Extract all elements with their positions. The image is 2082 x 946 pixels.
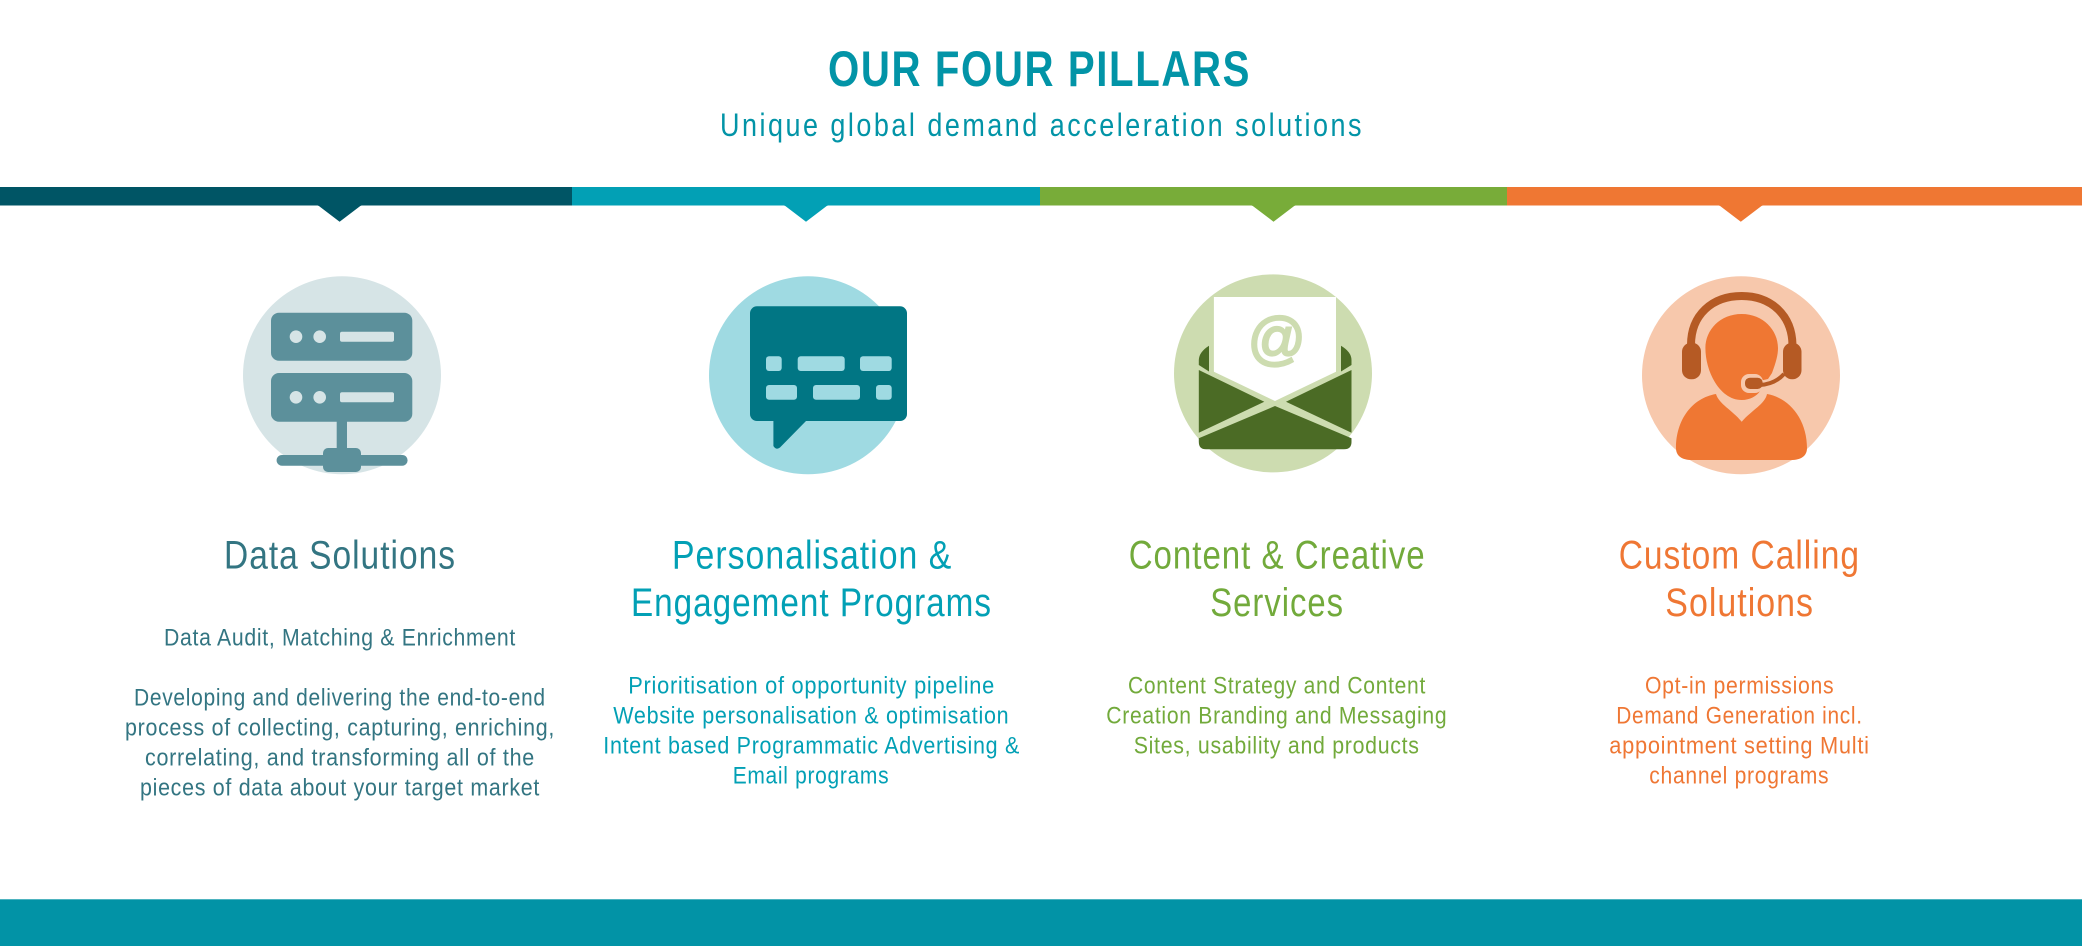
- text block: personalisation list: Website personalisation & optimisation: [613, 703, 1009, 730]
- text block: data description: pieces of data about your target market: [140, 775, 540, 802]
- panel: data solutions: [125, 276, 555, 802]
- icon: agent with headset: [1642, 276, 1840, 474]
- text block: data audit: Data Audit, Matching & Enrichment: [164, 625, 516, 652]
- heading: custom calling: [1619, 534, 1860, 625]
- panel: content and creative: [1106, 274, 1447, 760]
- text block: data description: correlating, and transforming all of the: [145, 745, 535, 772]
- text block: personalisation list: Intent based Programmatic Advertising &: [603, 733, 1020, 760]
- text block: data description: [125, 685, 555, 802]
- subtitle: Unique global demand acceleration solutions: [720, 107, 1364, 143]
- icon: speech bubble: [709, 276, 907, 474]
- heading: personalisation and engagement: Engagement Programs: [631, 581, 992, 625]
- band segment: content: [1040, 187, 1507, 222]
- text block: content list: [1106, 673, 1447, 760]
- text block: calling list: [1609, 673, 1870, 790]
- icon: open envelope with at sign: @: [1248, 306, 1306, 372]
- heading: content and creative: [1129, 534, 1426, 625]
- footer band: [0, 899, 2082, 946]
- colour band with four pointers: [0, 187, 2082, 222]
- text block: calling list: Demand Generation incl.: [1616, 703, 1863, 730]
- icon: server network: [243, 276, 441, 474]
- heading: data solutions: Data Solutions: [224, 534, 456, 578]
- icon: open envelope with at sign: [1174, 274, 1372, 472]
- text block: personalisation list: Email programs: [733, 763, 889, 790]
- heading: content and creative: Services: [1210, 581, 1344, 625]
- band segment: custom calling: [1507, 187, 2082, 222]
- text block: content list: Creation Branding and Messaging: [1106, 703, 1447, 730]
- band segment: data solutions: [0, 187, 572, 222]
- heading: personalisation and engagement: [631, 534, 992, 625]
- text block: calling list: channel programs: [1649, 763, 1829, 790]
- text block: calling list: appointment setting Multi: [1609, 733, 1870, 760]
- text block: data description: process of collecting, capturing, enriching,: [125, 715, 555, 742]
- text block: data description: Developing and delivering the end-to-end: [134, 685, 546, 712]
- text block: content list: Content Strategy and Content: [1128, 673, 1426, 700]
- panel: custom calling: [1609, 276, 1870, 790]
- band segment: personalisation: [572, 187, 1040, 222]
- panel: personalisation and engagement: [603, 276, 1020, 790]
- title: OUR FOUR PILLARS: [828, 41, 1251, 97]
- text block: content list: Sites, usability and products: [1134, 733, 1420, 760]
- text block: personalisation list: Prioritisation of opportunity pipeline: [628, 673, 995, 700]
- heading: custom calling: Solutions: [1665, 581, 1814, 625]
- heading: custom calling: Custom Calling: [1619, 534, 1860, 578]
- text block: personalisation list: [603, 673, 1020, 790]
- heading: personalisation and engagement: Personalisation &: [672, 534, 952, 578]
- text block: calling list: Opt-in permissions: [1645, 673, 1834, 700]
- heading: content and creative: Content & Creative: [1129, 534, 1426, 578]
